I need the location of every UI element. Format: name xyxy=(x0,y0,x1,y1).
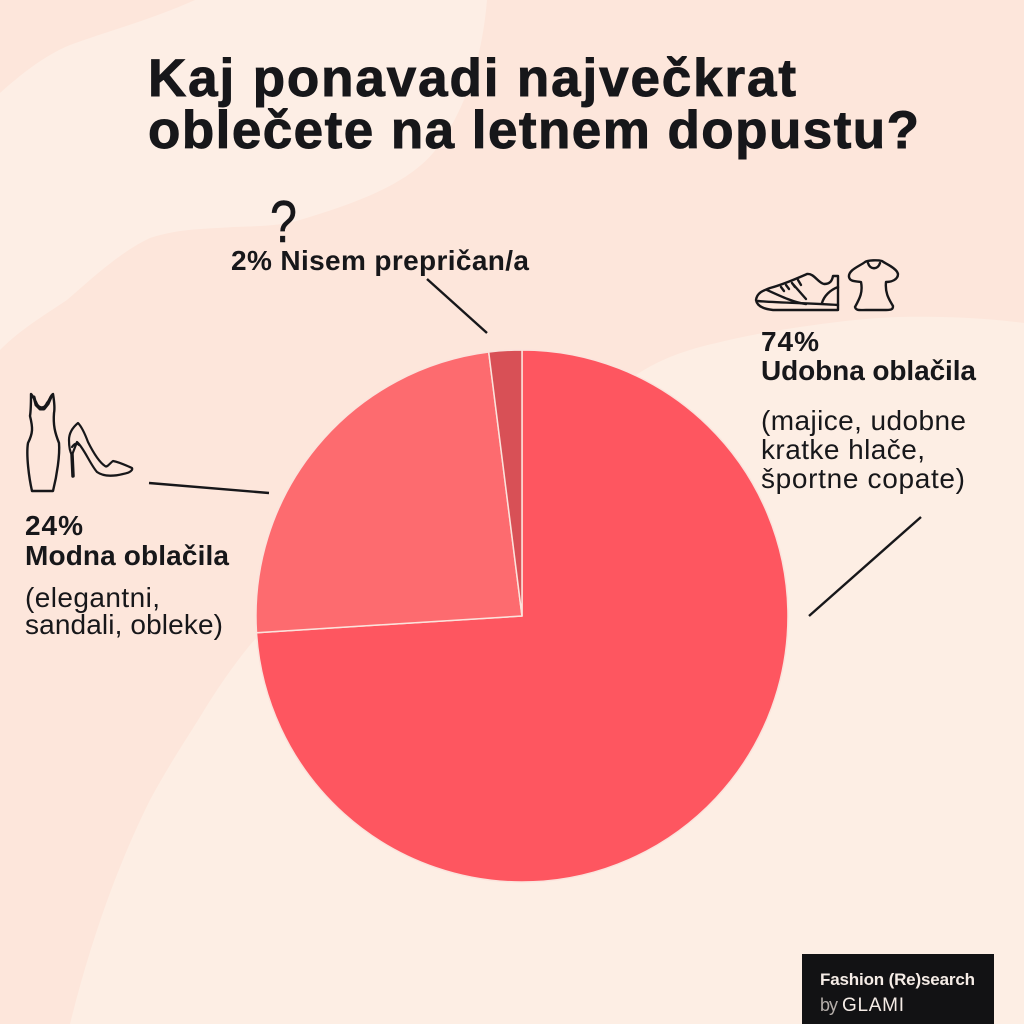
icon: t-shirt xyxy=(849,260,898,310)
logo badge: by xyxy=(820,995,838,1015)
label: 74% comfortable clothes: (majice, udobne xyxy=(761,405,966,436)
label: 24% fashionable clothes: sandali, obleke) xyxy=(25,609,223,640)
label: 74% comfortable clothes: kratke hlače, xyxy=(761,434,925,465)
title: Kaj ponavadi največkrat xyxy=(148,49,796,108)
label: 24% fashionable clothes: (elegantni, xyxy=(25,582,160,613)
label: 24% fashionable clothes xyxy=(25,510,229,640)
logo badge: Fashion (Re)search xyxy=(820,970,975,989)
pie chart xyxy=(256,350,788,882)
icon: sneaker xyxy=(756,274,838,310)
leader line: 74% xyxy=(809,517,921,616)
icon: question mark: ? xyxy=(270,189,297,255)
label: 74% comfortable clothes: športne copate) xyxy=(761,463,965,494)
label: 24% fashionable clothes: 24% xyxy=(25,510,83,541)
label: 74% comfortable clothes: 74% xyxy=(761,326,819,357)
label: 74% comfortable clothes xyxy=(761,326,976,494)
slice: 24% fashionable clothes xyxy=(256,352,522,633)
logo badge: GLAMI xyxy=(842,995,904,1016)
title xyxy=(148,49,919,160)
label: 74% comfortable clothes: Udobna oblačila xyxy=(761,355,976,386)
leader line: 2% xyxy=(427,279,487,333)
icon: dress xyxy=(27,394,59,491)
label: 24% fashionable clothes: Modna oblačila xyxy=(25,540,229,571)
slice: 2% not sure xyxy=(489,350,522,616)
label: 2% not sure: 2% Nisem prepričan/a xyxy=(231,245,529,276)
leader line: 24% xyxy=(149,483,269,493)
title: oblečete na letnem dopustu? xyxy=(148,101,919,160)
slice: 74% comfortable clothes xyxy=(256,350,788,882)
icon: high heel xyxy=(69,423,132,476)
logo badge xyxy=(802,954,994,1024)
